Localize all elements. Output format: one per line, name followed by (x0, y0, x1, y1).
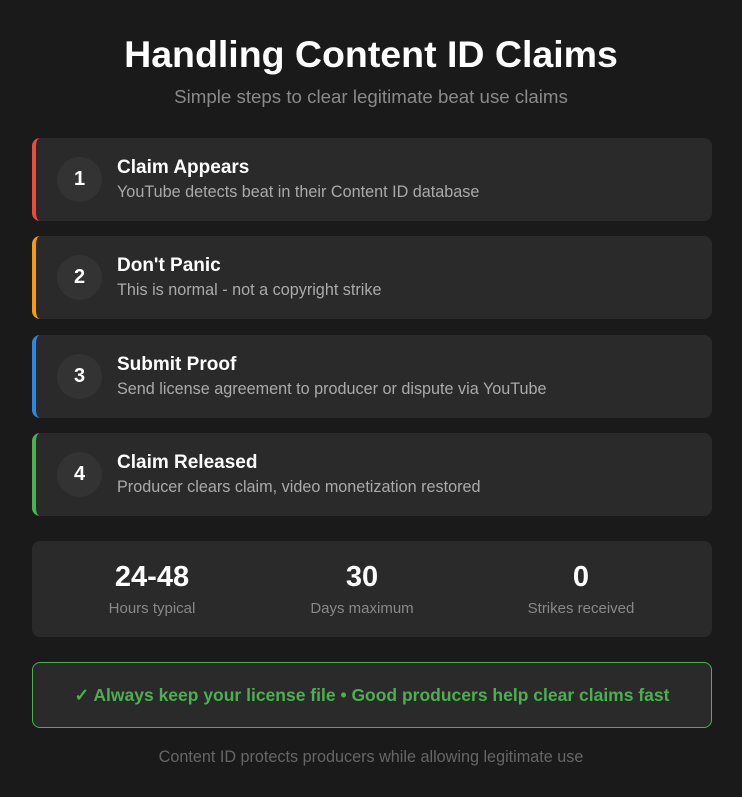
step 1 card: Claim Appears (117, 157, 249, 178)
stats panel: Days maximum (310, 600, 414, 617)
step 1 card: YouTube detects beat in their Content ID database (117, 183, 479, 201)
step 3 card (32, 335, 712, 418)
step 4 card: 4 (74, 463, 85, 485)
step 1 card: 1 (74, 168, 85, 190)
step 4 card: Claim Released (117, 452, 257, 473)
step 2 card (32, 236, 712, 319)
subtitle: Simple steps to clear legitimate beat use claims (174, 86, 568, 107)
step 2 card: Don't Panic (117, 255, 221, 276)
step 3 card: 3 (74, 365, 85, 387)
stats panel: 0 (573, 561, 589, 593)
step 2 card: This is normal - not a copyright strike (117, 281, 382, 299)
step 2 card: 2 (74, 266, 85, 288)
stats panel: Hours typical (109, 600, 195, 617)
stats panel (32, 541, 712, 637)
step 3 card: Send license agreement to producer or dispute via YouTube (117, 380, 547, 398)
step 1 card (32, 138, 712, 221)
step 4 card: Producer clears claim, video monetization restored (117, 478, 480, 496)
callout (32, 662, 712, 728)
step 4 card (32, 433, 712, 516)
title: Handling Content ID Claims (124, 33, 618, 75)
stats panel: Strikes received (528, 600, 634, 617)
stats panel: 30 (346, 561, 378, 593)
footer: Content ID protects producers while allowing legitimate use (159, 748, 583, 766)
callout: ✓ Always keep your license file • Good producers help clear claims fast (75, 685, 669, 705)
step 3 card: Submit Proof (117, 354, 236, 375)
stats panel: 24-48 (115, 561, 189, 593)
